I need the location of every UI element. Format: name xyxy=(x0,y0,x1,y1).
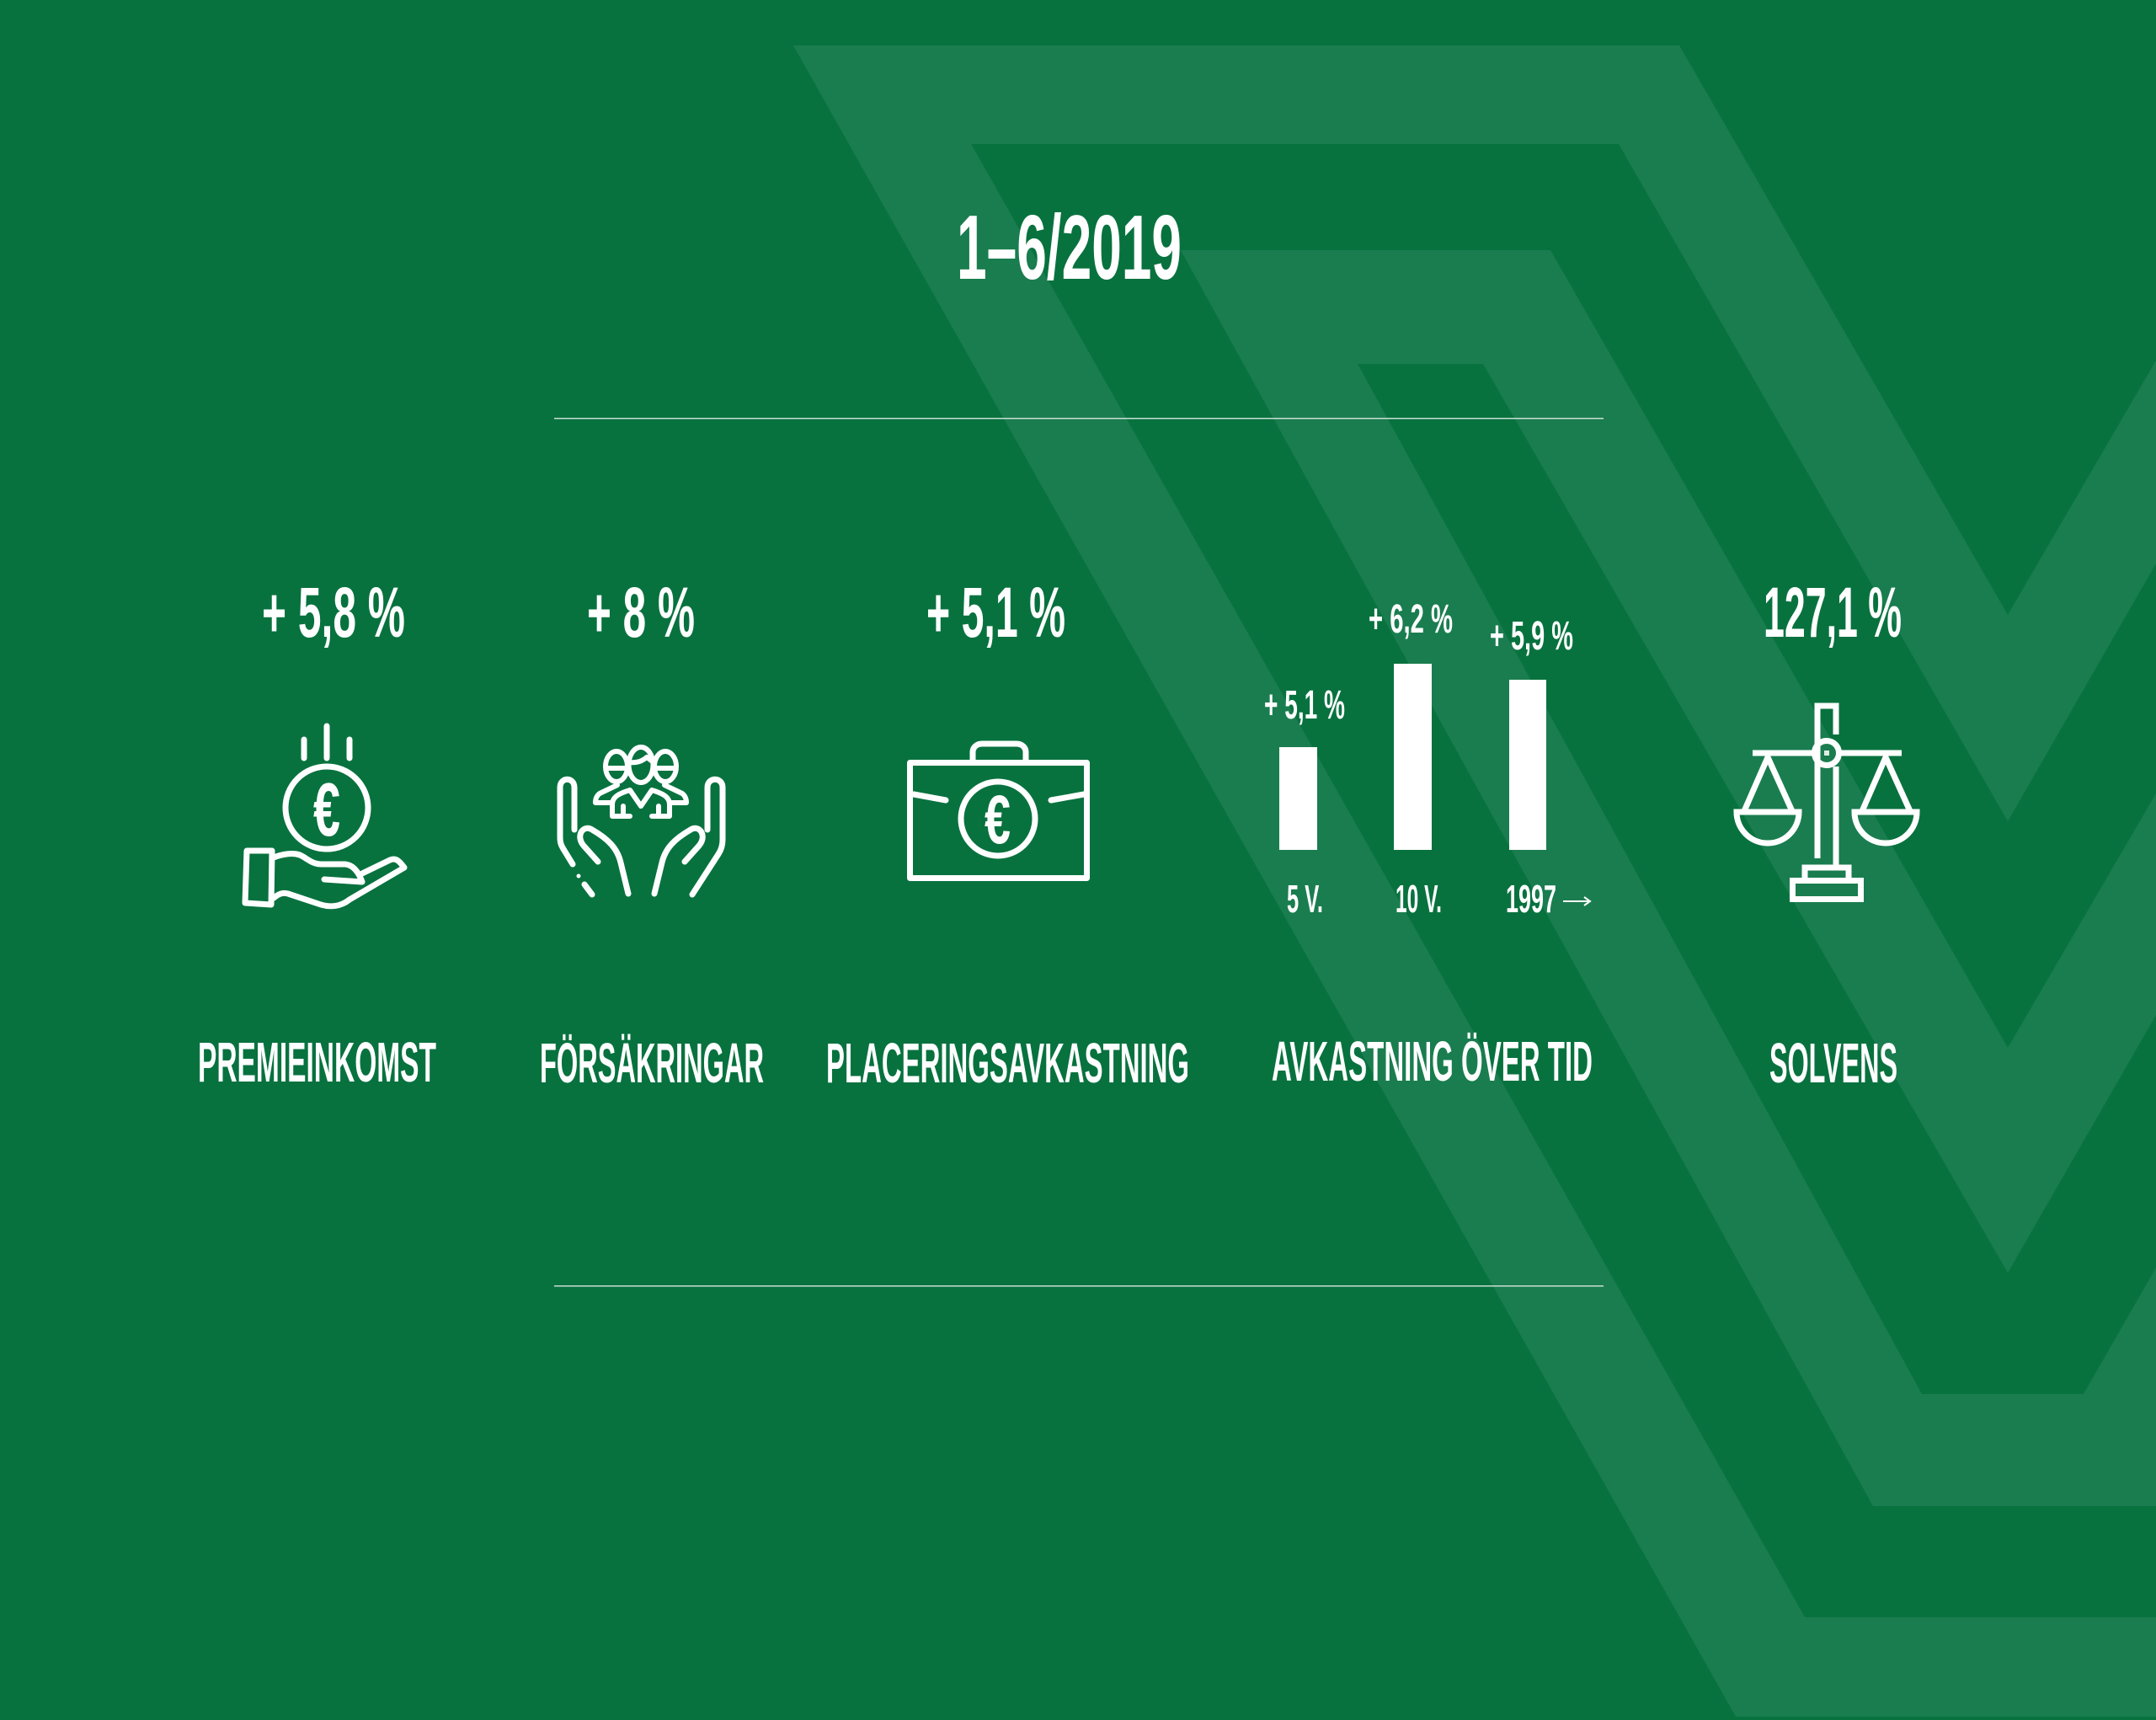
text: PLACERINGSAVKASTNING xyxy=(826,1032,1189,1095)
panel: solvens xyxy=(1737,573,1917,1095)
icon: hands holding people xyxy=(560,747,723,895)
bar: 10 years xyxy=(1369,597,1453,921)
bar: since 1997 xyxy=(1490,614,1590,921)
bar: 5 years: + 5,1 % xyxy=(1264,683,1345,728)
icon: coin falling into hand: € xyxy=(313,768,340,852)
panel: försäkringar xyxy=(540,573,764,1095)
text: AVKASTNING ÖVER TID xyxy=(1272,1030,1593,1093)
label: premieinkomst: PREMIEINKOMST xyxy=(198,1031,436,1094)
bar: 10 years: 10 V. xyxy=(1396,877,1442,921)
panel: avkastning över tid xyxy=(1264,597,1593,1093)
bar: since 1997: 1997 xyxy=(1506,877,1556,921)
title: 1–6/2019 xyxy=(957,196,1182,299)
divider: top rule xyxy=(554,418,1604,419)
icon: balance scales xyxy=(1737,706,1917,900)
stat: solvens value: 127,1 % xyxy=(1764,573,1902,652)
bar: 5 years xyxy=(1264,683,1345,921)
stat: placeringsavkastning value: + 5,1 % xyxy=(926,573,1065,652)
bar chart: returns over time xyxy=(1264,597,1590,921)
background: inner chevron band xyxy=(1181,250,2156,1506)
icon: coin falling into hand xyxy=(245,726,404,906)
icon: briefcase with euro: € xyxy=(985,782,1011,858)
stat: försäkringar value: + 8 % xyxy=(587,573,695,652)
bar: 10 years: + 6,2 % xyxy=(1369,597,1453,642)
stat: premieinkomst value: + 5,8 % xyxy=(262,573,405,652)
panel: placeringsavkastning xyxy=(826,573,1189,1095)
icon: briefcase with euro xyxy=(910,744,1086,878)
divider: bottom rule xyxy=(554,1285,1604,1287)
panel: premieinkomst xyxy=(198,573,436,1094)
panel: solvens: SOLVENS xyxy=(1769,1032,1897,1095)
background: outer chevron band xyxy=(793,45,2156,1717)
text: FÖRSÄKRINGAR xyxy=(540,1032,764,1095)
bar: 5 years: 5 V. xyxy=(1287,877,1323,921)
bar: since 1997: + 5,9 % xyxy=(1490,614,1573,659)
